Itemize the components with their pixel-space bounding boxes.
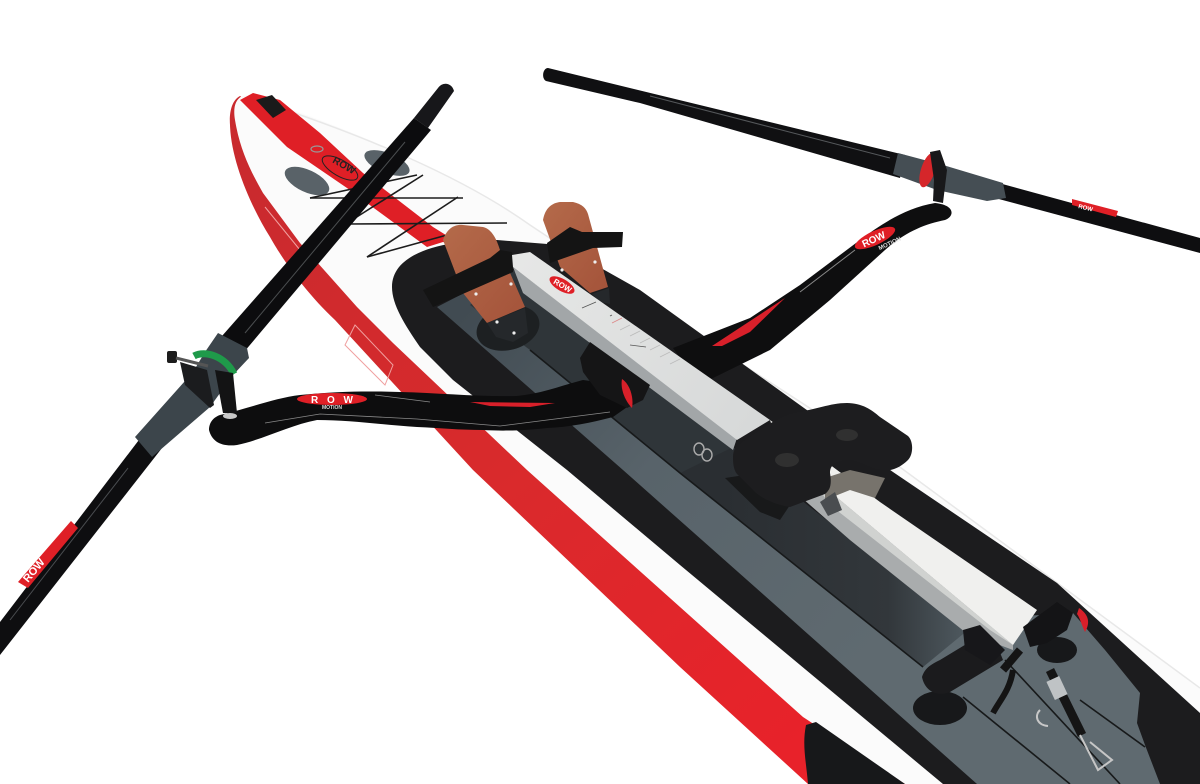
grey deck panel — [437, 290, 1160, 784]
highlight — [800, 250, 855, 292]
red sweep — [470, 402, 555, 407]
rigger logo: MOTION — [878, 236, 902, 252]
seat wheels — [825, 470, 885, 500]
deck groove lines — [530, 350, 1145, 784]
metal buckle — [1046, 676, 1068, 700]
wing nut — [167, 351, 208, 366]
board deck: white — [234, 95, 1200, 784]
footplate — [543, 202, 608, 293]
rigger logo — [297, 393, 367, 411]
footplate — [443, 225, 525, 323]
carry handle — [256, 95, 286, 118]
red sweep — [712, 298, 785, 346]
silver side — [513, 267, 737, 450]
deck edge shading — [280, 108, 1200, 688]
shaft with handle — [543, 68, 905, 178]
paddle board — [230, 93, 1200, 784]
lower shaft — [995, 182, 1200, 253]
rigger logo — [852, 222, 902, 254]
metal clip — [1080, 735, 1112, 770]
tail black patch — [804, 722, 905, 784]
seat holes — [775, 453, 799, 467]
strap — [547, 227, 623, 263]
rivets — [474, 282, 516, 335]
green clamp — [194, 354, 234, 374]
red band — [1072, 199, 1118, 217]
seat shell — [733, 403, 912, 507]
sliding rail — [512, 252, 1037, 650]
D ring — [1037, 710, 1048, 726]
rear white top — [770, 420, 1037, 645]
rail clamp with red ring — [580, 342, 650, 408]
oarlock post — [930, 150, 947, 203]
strap — [1050, 670, 1082, 735]
logo on stripe — [319, 151, 361, 185]
grey collar and sleeve — [893, 153, 1006, 201]
rigger logo: ROW — [861, 230, 888, 250]
handle grip — [414, 84, 454, 128]
seat bracket — [725, 475, 790, 520]
red clamp — [916, 151, 940, 189]
right oar — [543, 68, 1200, 253]
rear silver side — [770, 460, 1013, 650]
logo on rail: ROW — [552, 277, 574, 295]
roller block — [963, 625, 1005, 665]
left oar: ROW — [21, 556, 48, 585]
rigger logo: MOTION — [322, 405, 342, 411]
D rings on deck — [694, 443, 712, 461]
heel shadow — [471, 298, 545, 358]
D ring on stripe — [311, 146, 323, 152]
curved bracket — [993, 670, 1013, 713]
bungee cords — [310, 175, 507, 257]
rigger logo: ROW — [311, 395, 354, 406]
side panel outlines — [265, 207, 393, 385]
highlights — [265, 395, 610, 426]
rail end stop — [913, 602, 1112, 770]
oarlock post — [215, 370, 237, 413]
sliding seat — [725, 403, 912, 520]
suction disc left — [913, 691, 967, 725]
shadow under rail — [680, 447, 968, 667]
clamp — [1023, 602, 1073, 647]
board hull: red side — [230, 96, 1150, 784]
ruler markings — [582, 302, 680, 364]
grey traction pad right — [361, 145, 413, 181]
heel cup — [592, 288, 610, 304]
upper shaft — [222, 118, 431, 352]
right rigger arm — [673, 203, 952, 385]
rail top surface — [512, 252, 770, 440]
red band — [18, 521, 78, 588]
left oar — [0, 84, 454, 655]
logo on stripe: ROW — [330, 155, 357, 177]
right footrest — [543, 202, 623, 304]
red knob — [1077, 608, 1088, 632]
left rigger arm — [209, 380, 630, 445]
oarlock body — [180, 362, 214, 408]
right oar: ROW — [1078, 204, 1094, 214]
rear mid band — [800, 462, 1013, 645]
rivets — [560, 260, 597, 272]
red centre stripe — [240, 93, 470, 250]
grey traction pad left — [281, 161, 333, 201]
black roller — [922, 640, 1003, 694]
grey collar and sleeve — [135, 333, 249, 457]
strap — [423, 250, 513, 307]
lower shaft — [0, 432, 162, 655]
left footrest — [423, 225, 528, 342]
heel cup — [487, 308, 528, 342]
suction disc right — [1037, 637, 1077, 663]
logo on rail — [547, 273, 577, 297]
black deck pad — [392, 240, 1200, 784]
dark panel beside rail — [470, 270, 735, 473]
